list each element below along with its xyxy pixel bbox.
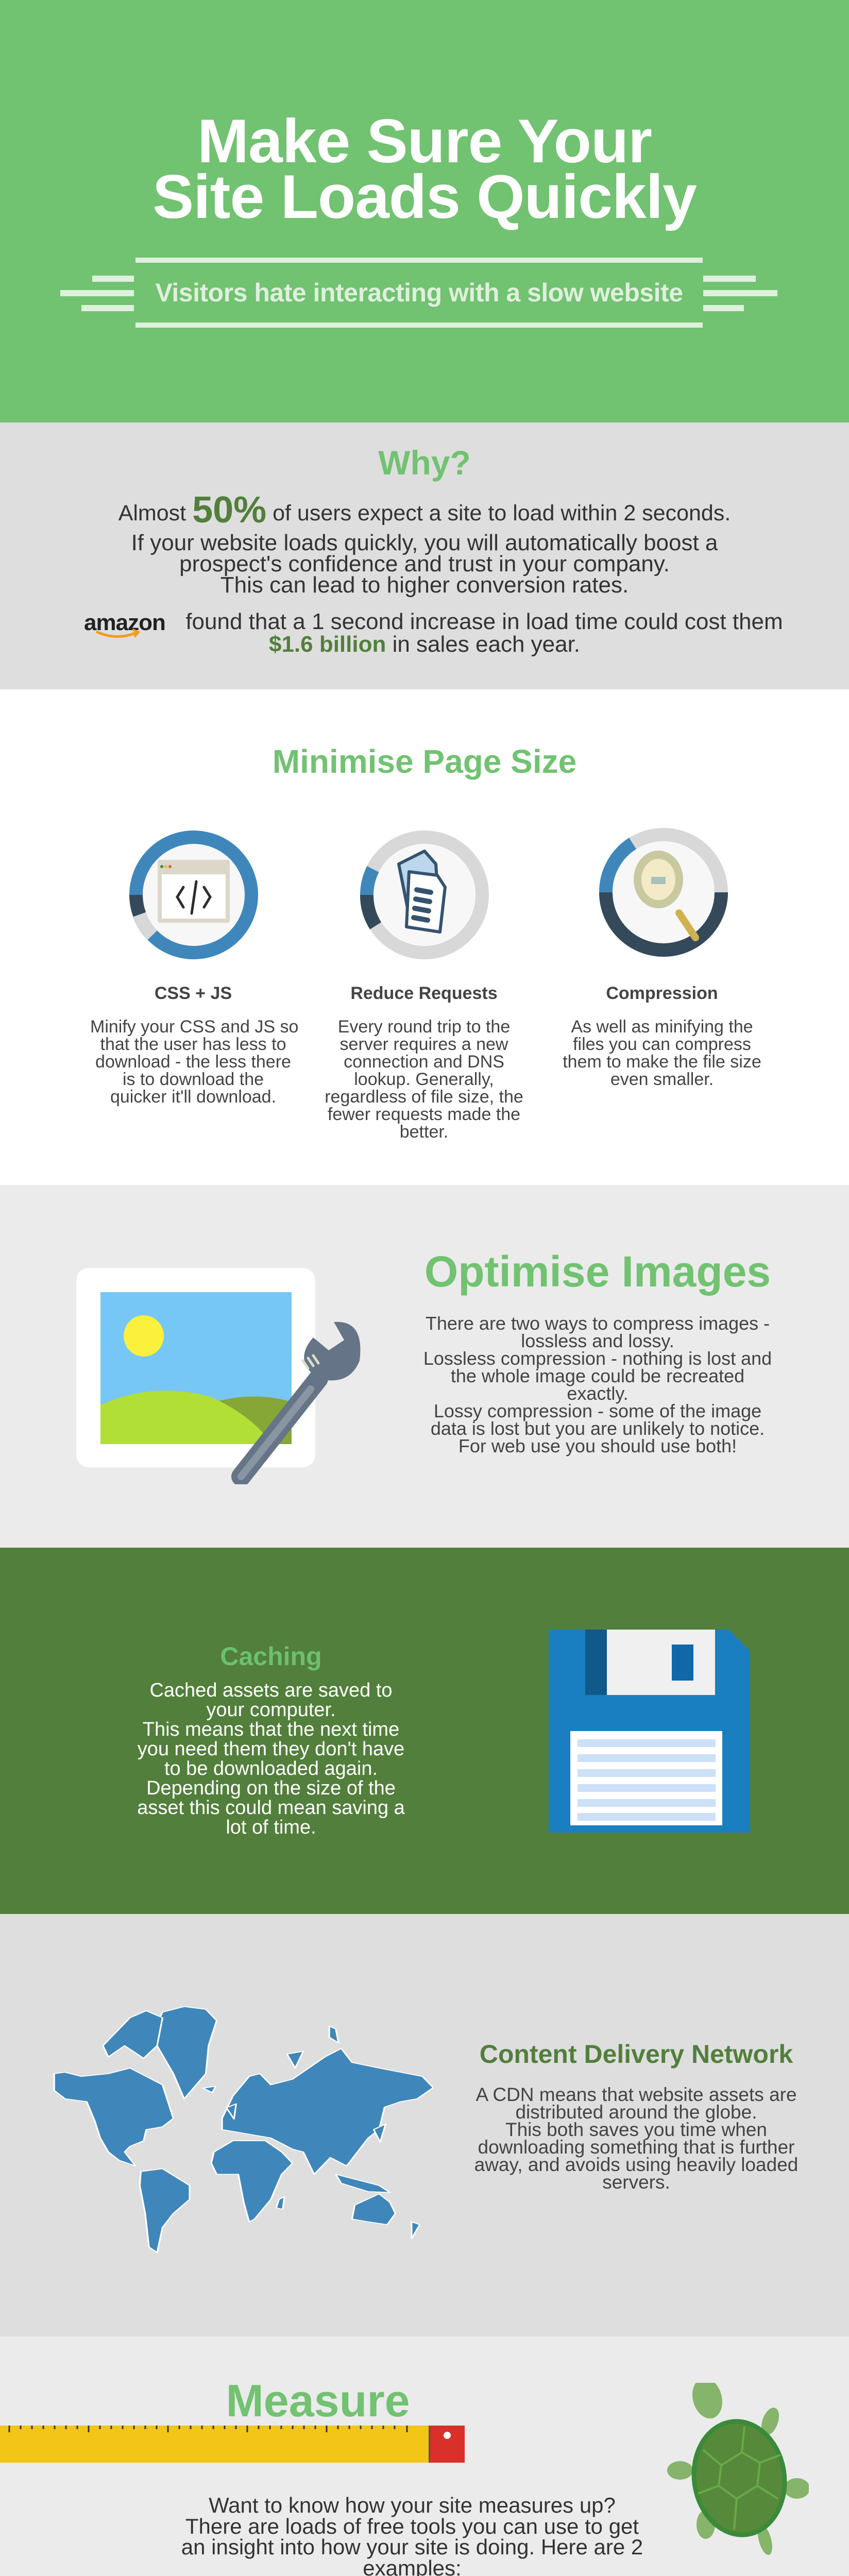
icon: picture with wrench <box>76 1268 361 1484</box>
text: css js: Minify your CSS and JS so <box>90 1017 298 1037</box>
icon: compression circle <box>599 828 728 957</box>
text: optimise <box>423 1313 772 1456</box>
text: confidence <box>131 530 718 598</box>
text: reduce requests: server requires a new <box>340 1035 508 1054</box>
text: cdn <box>474 2084 798 2193</box>
subtitle banner <box>60 258 777 328</box>
text: optimise: Lossless compression - nothing is lost and <box>423 1348 772 1369</box>
text: confidence: If your website loads quickly, you will automatically boost a <box>131 530 718 555</box>
text: css js: is to download the <box>123 1070 264 1089</box>
text: cdn: This both saves you time when <box>505 2119 767 2140</box>
text: css js <box>90 1017 298 1107</box>
text: cdn: A CDN means that website assets are <box>476 2084 797 2105</box>
text: css js: download - the less there <box>95 1052 291 1072</box>
title: Site Loads Quickly <box>152 162 697 231</box>
text: reduce requests: better. <box>400 1122 448 1142</box>
stat: 50%: Almost 50% of users expect a site to load within 2 seconds. <box>118 489 731 531</box>
icon: floppy disk <box>549 1630 750 1833</box>
text: css js: quicker it'll download. <box>110 1087 276 1107</box>
icon: world map <box>54 2006 433 2253</box>
text: measure intro: an insight into how your site is doing. Here are 2 <box>181 2535 643 2559</box>
icon: turtle <box>667 2383 809 2555</box>
panel: caching <box>0 1548 849 1914</box>
icon: tape measure <box>0 2426 465 2463</box>
label: css js: CSS + JS <box>155 984 232 1003</box>
text: compression: them to make the file size <box>563 1052 761 1072</box>
title: Make Sure Your <box>197 107 652 176</box>
text: compression <box>563 1017 761 1089</box>
panel: measure <box>0 2336 849 2576</box>
heading: optimise images: Optimise Images <box>424 1247 771 1296</box>
text: optimise: the whole image could be recreated <box>451 1365 744 1386</box>
icon: requests circle <box>360 831 489 959</box>
panel: minimise page size <box>0 689 849 1185</box>
text: compression: even smaller. <box>610 1070 714 1089</box>
title <box>152 107 697 231</box>
text: caching: Depending on the size of the <box>146 1777 396 1799</box>
text: caching: your computer. <box>206 1699 336 1721</box>
text: cdn: distributed around the globe. <box>515 2102 757 2123</box>
text: optimise: lossless and lossy. <box>521 1330 674 1351</box>
text: compression: As well as minifying the <box>571 1017 753 1037</box>
heading: caching: Caching <box>220 1642 322 1671</box>
text: caching: This means that the next time <box>143 1719 399 1740</box>
heading: minimise: Minimise Page Size <box>273 743 576 780</box>
text: reduce requests: fewer requests made the <box>328 1105 520 1124</box>
label: reduce requests: Reduce Requests <box>350 984 498 1003</box>
text: cdn: away, and avoids using heavily loaded <box>474 2154 798 2175</box>
text: optimise: There are two ways to compress images - <box>426 1313 770 1334</box>
text: reduce requests: lookup. Generally, <box>354 1070 494 1089</box>
text: confidence: This can lead to higher conversion rates. <box>220 572 629 598</box>
text: reduce requests: Every round trip to the <box>338 1017 510 1037</box>
label: compression: Compression <box>606 984 718 1003</box>
panel: why <box>0 422 849 689</box>
text: reduce requests: connection and DNS <box>344 1052 504 1072</box>
header section <box>0 0 849 422</box>
text: css js: that the user has less to <box>100 1035 286 1054</box>
text: caching: Cached assets are saved to <box>149 1680 393 1701</box>
text: compression: files you can compress <box>573 1035 751 1054</box>
text: measure intro: Want to know how your site measures up? <box>209 2493 616 2517</box>
text: reduce requests: regardless of file size, the <box>325 1087 523 1107</box>
amazon stat: $1.6 billion in sales each year. <box>269 632 580 657</box>
text: caching <box>137 1680 405 1838</box>
amazon stat <box>84 609 783 657</box>
text: optimise: For web use you should use both! <box>459 1435 737 1456</box>
text: optimise: Lossy compression - some of the image <box>434 1400 761 1421</box>
text: cdn: servers. <box>602 2172 670 2193</box>
amazon stat: found that a 1 second increase in load time could cost them <box>185 609 783 634</box>
heading: why: Why? <box>378 444 471 482</box>
text: caching: you need them they don't have <box>138 1738 404 1760</box>
icon: css js circle <box>129 831 258 959</box>
panel: cdn <box>0 1914 849 2336</box>
text: confidence: prospect's confidence and trust in your company. <box>179 551 670 577</box>
text: optimise: exactly. <box>567 1383 629 1404</box>
text: cdn: downloading something that is further <box>478 2137 794 2158</box>
text: caching: to be downloaded again. <box>164 1758 378 1780</box>
subtitle banner: Visitors hate interacting with a slow website <box>155 278 683 307</box>
icon: amazon logo: amazon <box>84 610 165 635</box>
panel: optimise images <box>0 1185 849 1548</box>
text: reduce requests <box>325 1017 523 1142</box>
text: optimise: data is lost but you are unlikely to notice. <box>431 1418 765 1439</box>
text: measure intro: There are loads of free tools you can use to get <box>185 2514 639 2538</box>
text: measure intro <box>181 2493 643 2576</box>
heading: cdn: Content Delivery Network <box>480 2040 793 2069</box>
heading: measure: Measure <box>226 2375 410 2426</box>
text: caching: asset this could mean saving a <box>137 1797 405 1819</box>
text: caching: lot of time. <box>226 1817 316 1838</box>
